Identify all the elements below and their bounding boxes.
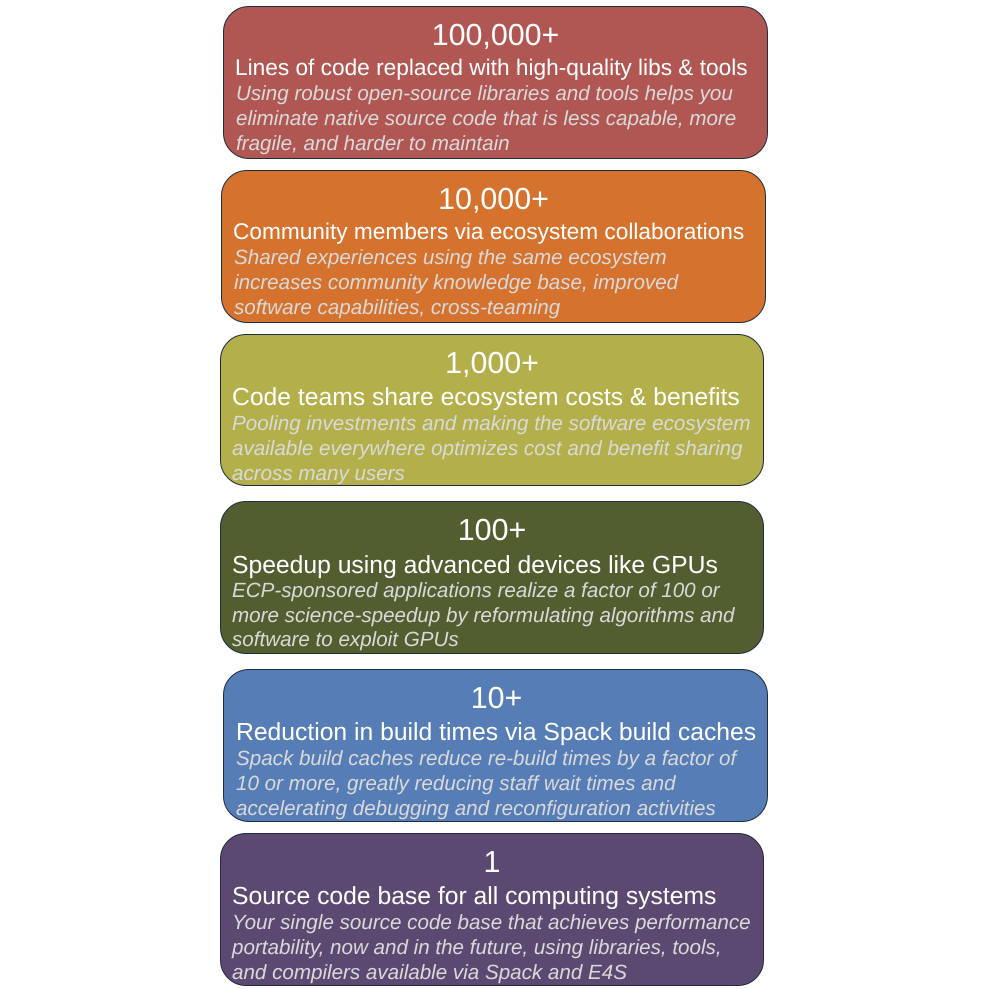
description: open-source libraries <box>236 82 736 155</box>
description: Spack build caches: 10 or more, greatly reducing staff wait times and <box>236 772 676 794</box>
description: shared experiences <box>234 246 679 319</box>
panel: 100,000+ lines of code <box>223 6 768 159</box>
description: single source code base <box>232 911 751 984</box>
description: open-source libraries: fragile, and harder to maintain <box>236 132 510 155</box>
description: Spack build caches: Spack build caches reduce re-build times by a factor of <box>236 746 736 770</box>
description: single source code base: and compilers available via Spack and E4S <box>232 961 627 984</box>
description: open-source libraries: Using robust open-source libraries and tools helps you <box>236 82 733 105</box>
number: 1,000+: 1,000+ <box>445 346 539 380</box>
description: single source code base: Your single source code base that achieves performance <box>232 911 751 934</box>
number: 10+: 10+ <box>471 681 522 715</box>
description: ECP applications: software to exploit GPUs <box>232 628 459 651</box>
description: Spack build caches <box>236 746 738 820</box>
description: pooling investments <box>232 412 751 485</box>
description: shared experiences: Shared experiences using the same ecosystem <box>234 246 667 269</box>
description: open-source libraries: eliminate native source code that is less capable, more <box>236 107 736 130</box>
description: ECP applications: ECP-sponsored applications realize a factor of 100 or <box>232 579 720 602</box>
description: single source code base: portability, now and in the future, using libraries, tools, <box>232 936 722 959</box>
number: 100,000+: 100,000+ <box>432 18 559 52</box>
heading: lines of code: Lines of code replaced with high-quality libs & tools <box>235 54 748 80</box>
number: 10,000+: 10,000+ <box>438 182 549 216</box>
panel: 10+ build times <box>223 669 768 822</box>
number: 100+: 100+ <box>458 513 526 547</box>
description: shared experiences: software capabilities, cross-teaming <box>234 296 560 319</box>
heading: source code base: Source code base for all computing systems <box>232 883 716 910</box>
heading: build times: Reduction in build times via Spack build caches <box>236 719 756 746</box>
description: ECP applications: more science-speedup by reformulating algorithms and <box>232 604 735 627</box>
description: pooling investments: available everywhere optimizes cost and benefit sharing <box>232 437 743 460</box>
panel: 100+ speedup <box>220 501 764 654</box>
number: 1: 1 <box>484 845 500 879</box>
description: shared experiences: increases community knowledge base, improved <box>234 271 678 294</box>
description: pooling investments: Pooling investments and making the software ecosystem <box>232 412 751 435</box>
panel: 1 source code base <box>220 833 764 986</box>
description: ECP applications <box>232 579 735 651</box>
heading: community members: Community members via ecosystem collaborations <box>233 218 744 244</box>
description: pooling investments: across many users <box>232 462 405 485</box>
panel: 10,000+ community members <box>221 170 766 323</box>
heading: speedup: Speedup using advanced devices like GPUs <box>232 552 718 579</box>
panel: 1,000+ code teams <box>220 334 764 486</box>
heading: code teams: Code teams share ecosystem costs & benefits <box>232 384 740 411</box>
description: Spack build caches: accelerating debugging and reconfiguration activities <box>236 796 716 820</box>
